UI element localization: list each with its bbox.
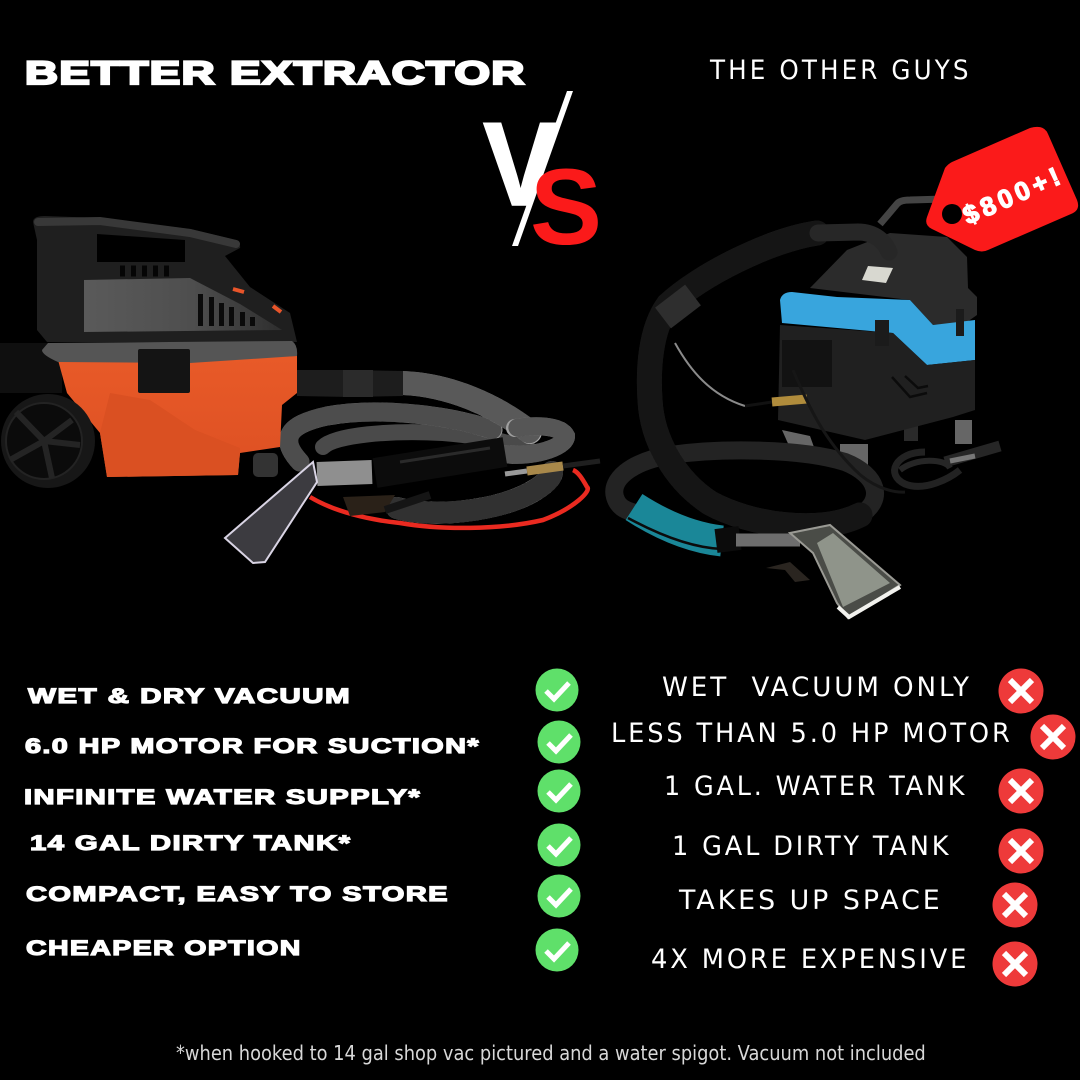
teal grip	[628, 507, 740, 549]
cross	[998, 828, 1044, 874]
latch	[138, 349, 190, 393]
footnote: *when hooked to 14 gal shop vac pictured and a water spigot. Vacuum not included	[176, 1041, 926, 1065]
chevrons	[892, 376, 928, 397]
power cord	[895, 446, 1000, 486]
product: other guys extractor	[605, 196, 1002, 620]
check	[538, 770, 580, 812]
price tag	[926, 126, 1078, 252]
check	[536, 928, 578, 972]
feature: LESS THAN 5.0 HP MOTOR	[611, 718, 1013, 749]
cross	[992, 882, 1038, 928]
orange tank	[58, 356, 297, 477]
VS logo: V	[483, 98, 558, 231]
wand	[317, 448, 600, 516]
VS logo	[482, 91, 602, 250]
title: better extractor: BETTER EXTRACTOR	[25, 55, 526, 91]
clear nozzle	[790, 525, 900, 618]
latches	[875, 309, 964, 346]
feature: WET & DRY VACUUM	[28, 685, 351, 708]
foot	[253, 453, 278, 477]
left tray	[0, 343, 62, 393]
product: better extractor vacuum	[0, 216, 600, 564]
trigger	[766, 562, 810, 582]
feature: COMPACT, EASY TO STORE	[26, 883, 449, 906]
handle opening	[97, 234, 185, 262]
check	[538, 720, 580, 764]
grey cable and brass fitting	[675, 343, 807, 406]
left feature list	[24, 685, 480, 960]
check	[538, 874, 580, 918]
check	[538, 824, 580, 866]
top of unit	[810, 233, 977, 325]
cross	[998, 768, 1044, 814]
feature: TAKES UP SPACE	[679, 885, 943, 916]
lower body	[778, 325, 975, 440]
warning label	[862, 266, 893, 283]
feature: 14 GAL DIRTY TANK*	[30, 832, 351, 855]
grey panel	[84, 278, 282, 332]
right feature list	[611, 672, 1013, 975]
black cable	[793, 370, 905, 492]
price tag: $800+!	[958, 161, 1065, 230]
cross	[1030, 714, 1076, 760]
cross	[998, 668, 1044, 714]
check	[536, 668, 578, 712]
feature: 1 GAL DIRTY TANK	[672, 831, 951, 862]
cross icons	[992, 668, 1076, 986]
blue band	[780, 292, 975, 365]
handle	[880, 199, 945, 224]
black motor head	[33, 216, 297, 342]
main hose	[614, 232, 889, 526]
handle bar	[38, 221, 236, 244]
hose coupler	[297, 370, 403, 397]
feature: 1 GAL. WATER TANK	[664, 771, 967, 802]
top vents	[120, 266, 172, 276]
wheels	[782, 420, 972, 466]
wand tube	[736, 534, 800, 546]
control panel	[782, 340, 832, 387]
title: the other guys: THE OTHER GUYS	[710, 55, 972, 86]
feature: 6.0 HP MOTOR FOR SUCTION*	[25, 735, 480, 758]
hose coils	[289, 383, 566, 513]
check icons	[536, 668, 580, 972]
feature: WET VACUUM ONLY	[662, 672, 972, 703]
feature: INFINITE WATER SUPPLY*	[24, 786, 421, 809]
feature: CHEAPER OPTION	[26, 937, 302, 960]
cross	[992, 942, 1038, 986]
wheel	[1, 394, 95, 488]
side vents	[198, 294, 255, 326]
orange buttons	[233, 289, 281, 312]
red cord	[310, 470, 588, 528]
grey rim	[42, 341, 297, 363]
clear nozzle	[225, 462, 317, 563]
feature: 4X MORE EXPENSIVE	[651, 944, 969, 975]
